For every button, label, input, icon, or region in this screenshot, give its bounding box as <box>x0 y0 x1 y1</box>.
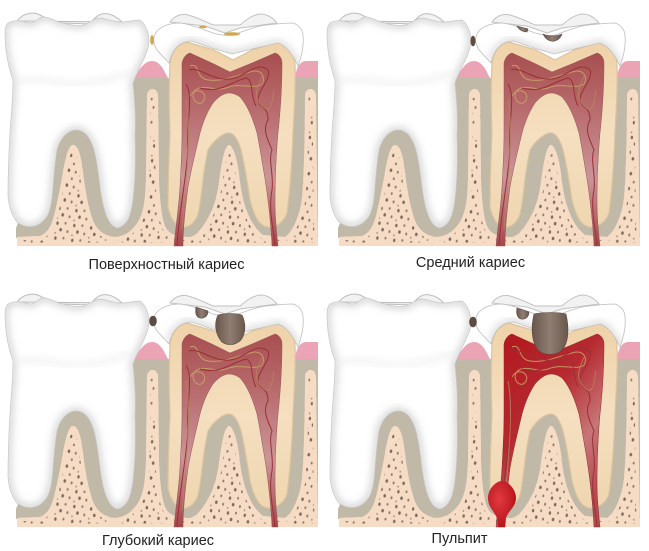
gum and bone <box>338 61 640 246</box>
caries cavities <box>150 307 245 345</box>
caption: Средний кариес <box>416 255 525 271</box>
caries spots <box>471 26 562 46</box>
right tooth dentin <box>490 323 617 508</box>
enamel crown <box>154 14 303 66</box>
nerves and vessels <box>499 65 597 246</box>
panel: superficial caries <box>5 13 318 273</box>
pulp <box>496 53 604 246</box>
nerves and vessels <box>177 346 275 527</box>
enamel crown <box>476 295 625 347</box>
pulp <box>174 334 282 527</box>
left healthy tooth <box>327 294 471 509</box>
gum and bone <box>16 61 318 246</box>
caption: Поверхностный кариес <box>89 257 244 273</box>
nerves and vessels <box>177 65 275 246</box>
inflamed pulp <box>496 334 604 527</box>
left healthy tooth <box>327 13 471 228</box>
nerves and vessels <box>499 346 597 527</box>
left healthy tooth <box>5 294 149 509</box>
panel: pulpitis <box>327 294 640 547</box>
right tooth dentin <box>490 42 617 227</box>
right tooth dentin <box>168 42 295 227</box>
caption: Пульпит <box>432 531 488 547</box>
right tooth dentin <box>168 323 295 508</box>
caption: Глубокий кариес <box>102 533 214 549</box>
gum and bone <box>16 342 318 527</box>
panel: medium caries <box>327 13 640 271</box>
enamel crown <box>476 14 625 66</box>
caries cavities <box>470 308 568 354</box>
gum and bone <box>338 342 640 527</box>
panel: deep caries <box>5 294 318 549</box>
left healthy tooth <box>5 13 149 228</box>
caries spots <box>150 26 240 45</box>
enamel crown <box>154 295 303 347</box>
pulp <box>174 53 282 246</box>
abscess at root apex <box>488 481 516 527</box>
